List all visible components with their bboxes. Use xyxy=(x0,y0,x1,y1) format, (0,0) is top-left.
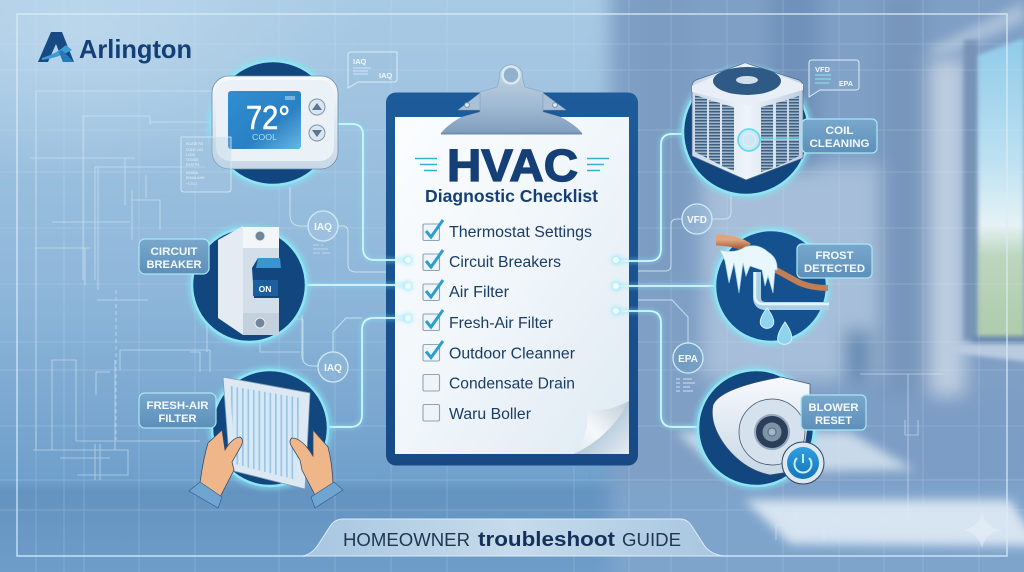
blueprint schematic xyxy=(30,91,943,540)
icon: power button xyxy=(782,442,824,484)
label: coil cleaning: CLEANING xyxy=(810,138,870,150)
item: Condensate Drain: Condensate Drain xyxy=(449,376,575,392)
icon: sparkle xyxy=(964,513,1000,548)
item: Air Filter: Air Filter xyxy=(449,284,509,301)
item: Waru Boller xyxy=(423,404,531,423)
thermostat badge circle xyxy=(211,61,335,185)
callout: IAQ speech bubble: IAQ xyxy=(379,71,392,80)
label: blower reset xyxy=(801,395,866,430)
icon: ice and icicles xyxy=(720,246,777,293)
callout: IAQ speech bubble: IAQ xyxy=(353,57,366,66)
label: frost detected xyxy=(797,244,872,278)
badge: EPA: EPA xyxy=(678,354,698,365)
item: Waru Boller: Waru Boller xyxy=(449,406,531,423)
clipboard board xyxy=(386,92,638,466)
heading decorative dashes xyxy=(415,158,609,170)
callout: VFD EPA speech bubble xyxy=(809,60,859,97)
callout: spec note box: HOATE RS xyxy=(186,142,204,146)
item: Fresh-Air Filter: Fresh-Air Filter xyxy=(449,315,553,332)
callout: spec note box: TOUISE xyxy=(186,158,199,162)
filter badge circle xyxy=(212,370,328,486)
callout: spec note box xyxy=(181,137,231,192)
icon: air filter xyxy=(223,377,310,489)
blower badge circle xyxy=(698,370,814,486)
heading: Diagnostic Checklist: Diagnostic Checklist xyxy=(425,186,598,206)
icon: right hand xyxy=(290,430,343,508)
item: Air Filter xyxy=(423,280,509,301)
icon: circuit breaker xyxy=(218,226,281,335)
label: circuit breaker: BREAKER xyxy=(146,259,202,271)
icon: thermostat: COOL xyxy=(252,132,277,142)
connector lines xyxy=(290,124,731,427)
item: Fresh-Air Filter xyxy=(423,310,553,332)
label: coil cleaning: COIL xyxy=(826,125,854,137)
badge: EPA xyxy=(673,343,703,391)
badge: IAQ lower xyxy=(318,352,348,382)
panel: clipboard checklist xyxy=(386,65,638,466)
icon: condenser unit xyxy=(692,63,803,180)
item: Circuit Breakers: Circuit Breakers xyxy=(449,254,561,271)
badge: IAQ upper xyxy=(308,211,338,253)
icon: page curl xyxy=(574,401,629,454)
item: Thermostat Settings xyxy=(423,220,592,241)
label: blower reset: RESET xyxy=(815,415,852,427)
badge: VFD: VFD xyxy=(687,215,707,226)
icon: circuit breaker: ON xyxy=(259,284,271,294)
item: Circuit Breakers xyxy=(423,250,561,271)
item: Thermostat Settings: Thermostat Settings xyxy=(449,224,592,241)
label: fresh-air filter: FILTER xyxy=(158,413,197,425)
label: fresh-air filter xyxy=(139,393,216,428)
logo wordmark: Arlington xyxy=(79,34,192,64)
icon: blower housing xyxy=(712,377,810,475)
badge: VFD xyxy=(682,204,712,234)
banner: homeowner troubleshoot guide xyxy=(303,519,723,556)
banner: homeowner troubleshoot guide: GUIDE xyxy=(622,530,681,550)
icon: white drain pipe xyxy=(755,272,829,306)
panel: blower xyxy=(698,370,866,486)
callout: spec note box: CODE 1HY xyxy=(186,148,204,152)
callout: spec note box: EXSTPS xyxy=(186,163,200,167)
item: Outdoor Cleanner: Outdoor Cleanner xyxy=(449,346,575,362)
icon: thermostat xyxy=(212,76,338,169)
banner: homeowner troubleshoot guide: troubleshoot xyxy=(478,529,615,551)
icon: thermostat: 72° xyxy=(246,99,290,136)
label: frost detected: FROST xyxy=(816,250,854,262)
callout: VFD EPA speech bubble: VFD xyxy=(815,65,831,74)
callout: spec note box: LOOK xyxy=(186,153,196,157)
AC badge circle xyxy=(683,69,809,195)
panel: frost detected xyxy=(715,230,872,344)
checklist items xyxy=(423,220,592,423)
label: blower reset: BLOWER xyxy=(808,402,859,414)
label: frost detected: DETECTED xyxy=(804,263,865,275)
callout: spec note box: ENVULAHH xyxy=(186,176,205,180)
banner: homeowner troubleshoot guide: HOMEOWNER xyxy=(343,530,470,550)
panel: thermostat xyxy=(211,61,338,185)
badge: IAQ upper: IAQ xyxy=(314,222,332,233)
label: circuit breaker: CIRCUIT xyxy=(150,246,198,258)
heading: HVAC: HVAC xyxy=(447,140,578,191)
callout: IAQ speech bubble xyxy=(348,52,397,88)
label: circuit breaker xyxy=(139,239,209,274)
frost badge circle xyxy=(715,230,827,342)
icon: water drops xyxy=(760,308,792,344)
panel: fresh-air filter xyxy=(139,370,343,508)
icon: clipboard clip xyxy=(441,65,582,134)
panel: circuit breaker xyxy=(139,226,306,342)
icon: left hand xyxy=(189,430,242,508)
breaker badge circle xyxy=(192,228,306,342)
logo: Arlington xyxy=(38,32,192,64)
paper sheet xyxy=(395,117,629,454)
label: coil cleaning xyxy=(802,119,877,153)
badge: IAQ lower: IAQ xyxy=(324,363,342,374)
icon: copper pipe xyxy=(716,240,828,288)
panel: outdoor AC unit xyxy=(683,63,877,195)
callout: VFD EPA speech bubble: EPA xyxy=(839,81,853,88)
label: fresh-air filter: FRESH-AIR xyxy=(146,400,209,412)
icon: logo mark xyxy=(38,32,74,62)
callout: spec note box: ~C7ICI xyxy=(186,182,197,186)
callout: spec note box: DEADA xyxy=(186,171,198,175)
item: Outdoor Cleanner xyxy=(423,341,575,362)
